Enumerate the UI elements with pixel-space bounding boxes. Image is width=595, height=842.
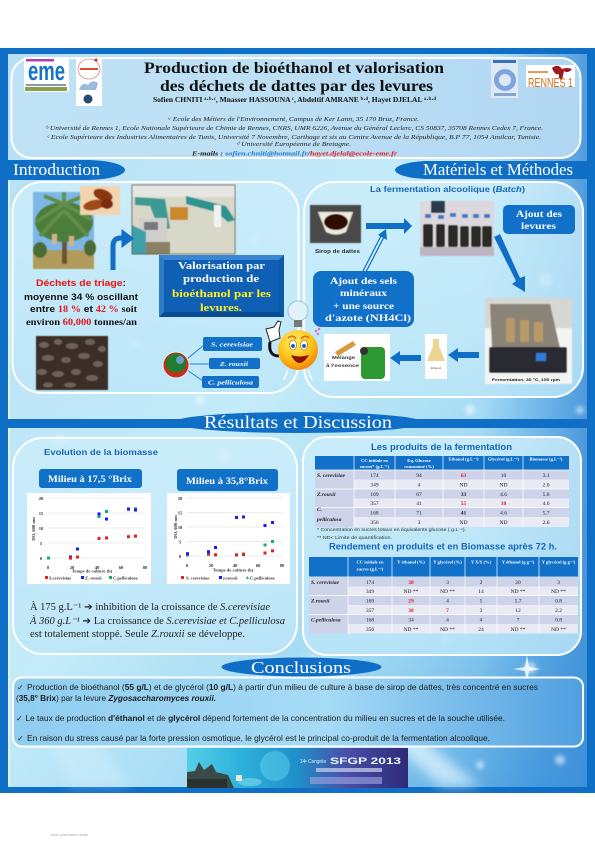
table: yields: CC initiale en — [356, 560, 384, 564]
title — [144, 60, 444, 95]
chart: biomass at 35.8 Brix: 80 — [280, 563, 285, 568]
table: yields: ND ** — [551, 589, 566, 595]
table: yields: Y glycérol (%) — [433, 560, 462, 564]
label: milieu 17,5 Brix: Milieu à 17,5 °Brix — [48, 474, 132, 485]
table: fermentation products: 5.8 — [543, 492, 550, 498]
header panel — [12, 56, 580, 158]
footnotes: * Concentration en sucres totaux en équivalents glucose ( g.L⁻¹). — [317, 527, 466, 532]
table: yields: S. cerevisiae — [311, 580, 340, 586]
chart: biomass at 35.8 Brix: 40 — [233, 563, 238, 568]
image: date syrup — [310, 205, 361, 243]
table: yields: 357 — [366, 608, 374, 614]
table: fermentation products: Biomasse (g.L⁻¹) — [530, 456, 563, 462]
callout: valorisation: levures. — [200, 303, 242, 314]
table: yields: 3 — [557, 580, 560, 586]
callout: ajout des levures — [503, 205, 575, 234]
panel: evolution de la biomasse — [13, 438, 297, 654]
chart: biomass at 17.5 Brix: 40 — [95, 565, 100, 570]
table: yields: 168 — [366, 618, 374, 624]
section heading: Matériels et Méthodes: Matériels et Méthodes — [423, 160, 573, 179]
arrow: minerals to flow — [363, 229, 387, 272]
chart: biomass at 17.5 Brix: Temps de culture (h) — [72, 568, 113, 574]
table: yields: ND ** — [511, 627, 526, 633]
chart: biomass at 35.8 Brix: S. cerevisiae — [186, 576, 209, 580]
table: fermentation products: 41 — [416, 501, 422, 507]
table: yields: 24 — [478, 627, 484, 633]
chart: biomass at 17.5 Brix: S.cerevisiae — [49, 576, 71, 580]
table: yields: 0.8 — [555, 618, 562, 624]
table: yields: 3 — [480, 608, 483, 614]
banner: SFGP 2013 — [187, 748, 408, 788]
table: yields: 174 — [366, 580, 374, 586]
table: yields: ND ** — [440, 589, 455, 595]
logo: EME — [24, 56, 69, 92]
text: growth interpretation — [29, 601, 285, 640]
table: yields: ND ** — [440, 627, 455, 633]
panel title: rendement: Rendement en produits et en Biomasse après 72 h. — [329, 542, 557, 552]
text: growth interpretation: À 175 g.L⁻¹ ➔ inhibition de la croissance de S.cerevisiae — [30, 601, 271, 613]
affiliations: ᵈ Université Européenne de Bretagne. — [237, 141, 351, 148]
text: déchets de triage: moyenne 34 % oscillant — [24, 292, 138, 302]
chart: biomass at 35.8 Brix: DO, 600 nm — [173, 515, 178, 539]
table: yields: 5 — [480, 598, 483, 604]
table: yields: 12 — [515, 608, 521, 614]
table: yields: 4 — [446, 598, 449, 604]
image: date palm — [33, 192, 96, 269]
logo: ESIAT — [491, 58, 518, 98]
chart: biomass at 17.5 Brix — [27, 493, 151, 584]
table: fermentation products: 41 — [461, 510, 466, 516]
section heading: Résultats et Discussion — [8, 412, 587, 433]
text: déchets de triage: Déchets de triage : — [36, 278, 126, 288]
table: fermentation products — [315, 456, 569, 527]
title: Production de bioéthanol et valorisation — [144, 60, 444, 77]
yeast strains diagram: S. cerevisiae — [211, 342, 253, 348]
table: yields: ND ** — [404, 589, 419, 595]
chart: biomass at 17.5 Brix: 80 — [143, 565, 148, 570]
callout: ajout des sels minéraux: + une source — [333, 302, 394, 312]
table: fermentation products: 4 — [418, 482, 421, 488]
callout: ajout des sels minéraux: d'azote (NH4Cl) — [325, 313, 411, 324]
conclusion 3: En raison du stress causé par la forte pression osmotique, le glycérol est le principal co-produit de la fermentation alcoolique. — [27, 734, 490, 743]
table: fermentation products: 169 — [370, 492, 379, 498]
chart: biomass at 35.8 Brix: 5 — [179, 540, 182, 544]
table: fermentation products: Z.rouxii — [316, 492, 336, 498]
image: fuel blend — [324, 334, 390, 381]
table: fermentation products: 356 — [370, 520, 379, 526]
arrow: flask to mixture — [390, 351, 421, 365]
table: fermentation products: S. cerevisiae — [317, 473, 346, 479]
arrow: to valorisation — [113, 234, 130, 270]
label: milieu 35,8 Brix — [177, 469, 278, 491]
panel title: produits de la fermentation: Les produits de la fermentation — [371, 442, 512, 452]
table: fermentation products: 2.0 — [543, 482, 550, 488]
table: yields — [309, 557, 578, 634]
table: yields: 2.2 — [555, 608, 562, 614]
table: yields: Z.rouxii — [310, 598, 330, 604]
table: yields: Y éthanol (g g⁻¹) — [502, 560, 535, 564]
section heading: Conclusions — [222, 658, 382, 677]
table: yields: 7 — [517, 618, 520, 624]
table: yields: 4 — [446, 618, 449, 624]
chart: biomass at 17.5 Brix: 60 — [119, 565, 124, 570]
chart: biomass at 35.8 Brix — [167, 493, 290, 584]
footnotes: ** ND< Limite de quantification. — [317, 535, 392, 540]
table: fermentation products: ND — [500, 520, 507, 526]
table: fermentation products: consommé (%) — [404, 464, 434, 469]
chart: biomass at 17.5 Brix: Z. rouxii — [85, 576, 102, 580]
chart: biomass at 35.8 Brix: 20 — [209, 563, 214, 568]
table: fermentation products: 3 — [418, 520, 421, 526]
table: yields: sucres (g.L⁻¹) — [357, 566, 384, 572]
e-mails: E-mails : sofien.chniti@hotmail.fr /hayet.djelal@ecole-eme.fr — [191, 150, 398, 158]
text: déchets de triage: environ 60,000 tonnes/an — [26, 317, 137, 327]
logo: Université de Rennes 1 — [526, 65, 575, 90]
callout: ajout des levures: levures — [521, 221, 557, 231]
chart: biomass at 17.5 Brix: 10 — [39, 526, 44, 531]
image: sorted date waste — [36, 336, 108, 390]
label: milieu 17,5 Brix — [39, 469, 142, 488]
table: fermentation products: 63 — [461, 473, 466, 479]
table: yields: ND ** — [511, 589, 526, 595]
table: yields: ND ** — [404, 627, 419, 633]
table: fermentation products: 168 — [370, 510, 379, 516]
arrow: syrup to bottles — [366, 218, 412, 234]
table: fermentation products: 5.7 — [543, 510, 550, 516]
panel: introduction — [12, 182, 298, 393]
table: fermentation products: C. — [317, 507, 322, 513]
table: yields: 34 — [408, 618, 414, 624]
arrow: shaker to flask — [448, 348, 479, 362]
logo: EME: eme — [28, 56, 65, 86]
table: fermentation products: 4.6 — [500, 492, 507, 498]
conclusion 1: Production de bioéthanol ( 55 g/L) et de glycérol (10 g/L) à partir d'un milieu de culture à base de sirop de dattes, très concentré en sucres — [27, 683, 538, 692]
table: yields: Y glycérol (g g⁻¹) — [542, 560, 576, 564]
image: culture bottles — [420, 201, 494, 256]
yeast strains diagram — [163, 337, 262, 388]
table: fermentation products: 2.6 — [543, 520, 550, 526]
table: yields: 14 — [478, 589, 484, 595]
conclusion 1 — [16, 683, 538, 703]
table: fermentation products: 174 — [370, 473, 379, 479]
affiliations: ᵇ Université de Rennes 1, Ecole Nationale Supérieure de Chimie de Rennes, CNRS, UMR 6226, Avenue du Général Leclerc, CS 50837, 35708 Rennes Cedex 7, France. — [46, 125, 543, 132]
chart: biomass at 17.5 Brix: 15 — [39, 511, 44, 516]
image: fuel blend: Mélange — [332, 355, 356, 360]
callout: ajout des sels minéraux — [313, 271, 414, 327]
callout: valorisation: production de — [183, 274, 259, 285]
conclusion 2: ✓ Le taux de production d'éthanol et de glycérol dépend fortement de la concentration du milieu en sucres et de la souche utilisée. — [16, 714, 505, 723]
chart: biomass at 17.5 Brix: 0 — [47, 565, 50, 570]
text: déchets de triage — [24, 278, 138, 327]
chart: biomass at 35.8 Brix: 15 — [178, 510, 183, 516]
table: fermentation products: 10 — [501, 473, 506, 479]
table: yields: 169 — [366, 598, 374, 604]
conclusion 1: ✓ — [17, 683, 24, 692]
section heading: Introduction — [8, 160, 125, 180]
conclusion 1: (35,8° Brix) par la levure Zygosaccharomyces rouxii. — [16, 694, 216, 703]
table: yields: 7 — [446, 608, 449, 614]
table: fermentation products: 67 — [416, 492, 422, 498]
chart: biomass at 35.8 Brix: 10 — [178, 525, 183, 530]
table: yields: 0.8 — [555, 598, 562, 604]
table: fermentation products: 4.6 — [500, 510, 507, 516]
banner: SFGP 2013: 14ᵉ Congrès — [300, 759, 326, 765]
section heading: Conclusions: Conclusions — [251, 658, 351, 677]
callout: ajout des levures: Ajout des — [516, 209, 563, 219]
chart: biomass at 35.8 Brix: C.pelliculosa — [250, 576, 275, 580]
table: yields: 4 — [480, 618, 483, 624]
table: fermentation products: sucres* (g.L⁻¹) — [360, 464, 389, 469]
icon: smiley with idea bulb — [266, 301, 320, 380]
table: yields: 29 — [408, 598, 414, 604]
panel title: La fermentation alcoolique ( Batch ) — [370, 184, 525, 194]
chart: biomass at 17.5 Brix: 0 — [40, 556, 43, 561]
affiliations: ᶜ Ecole Supérieure des Industries Alimentaires de Tunis, Université 7 Novembre, Carthage et sis au Centre Avenue de la République, B.P 77, 1054 Amilcar, Tunisie. — [47, 134, 541, 141]
banner: SFGP 2013: SFGP 2013 — [330, 756, 401, 766]
chart: biomass at 17.5 Brix: 20 — [39, 496, 44, 501]
table: fermentation products: 349 — [370, 482, 379, 488]
image: flask — [425, 334, 447, 379]
table: fermentation products: 357 — [370, 501, 379, 507]
affiliations — [46, 116, 543, 148]
logos: partner column — [76, 57, 102, 106]
table: yields: C.pelliculosa — [311, 618, 341, 624]
table: yields: 2 — [480, 580, 483, 586]
conclusion 3: ✓ — [17, 734, 24, 743]
chart: biomass at 35.8 Brix: 0 — [179, 554, 182, 559]
callout: ajout des sels minéraux: Ajout des sels — [330, 277, 397, 287]
table: fermentation products: 4.6 — [543, 501, 550, 507]
title: des déchets de dattes par des levures — [160, 78, 433, 95]
text: growth interpretation: À 360 g.L⁻¹ ➔ La croissance de S.cerevisiae et C.pelliculosa — [29, 615, 285, 627]
affiliations: ᵃ Ecole des Métiers de l'Environnement, Campus de Ker Lann, 35 170 Bruz, France. — [168, 116, 419, 123]
section heading: Résultats et Discussion: Résultats et Discussion — [204, 412, 392, 432]
callout: valorisation — [159, 255, 284, 317]
table: yields: 20 — [515, 580, 521, 586]
chart: biomass at 35.8 Brix: 60 — [256, 563, 261, 568]
text: growth interpretation: est totalement stoppé. Seule Z.rouxii se développe. — [30, 629, 245, 640]
chart: biomass at 35.8 Brix: z.rouxii — [223, 576, 238, 580]
image: dates — [80, 186, 120, 215]
callout: ajout des sels minéraux: minéraux — [340, 289, 387, 299]
authors: Sofien CHNITI ᵃ·ᵇ·ᶜ, Mnasser HASSOUNA ᶜ, Abdeltif AMRANE ᵇ·ᵈ, Hayet DJELAL ᵃ·ᵇ·ᵈ — [153, 95, 437, 104]
table: yields: 3 — [446, 580, 449, 586]
table: fermentation products: Glycérol (g.L⁻¹) — [488, 456, 520, 462]
table: fermentation products: Ethanol (g.L⁻¹) — [448, 456, 479, 462]
chart: biomass at 17.5 Brix: 20 — [70, 565, 75, 570]
table: yields: Y éthanol (%) — [397, 560, 425, 564]
table: fermentation products: 10 — [501, 501, 506, 507]
arrow: to shaker — [494, 234, 525, 292]
footer: view publication stats: View publication stats — [50, 832, 88, 837]
chart: biomass at 35.8 Brix: Temps de culture (h) — [213, 568, 254, 572]
table: fermentation products: CC initiale en — [361, 458, 388, 463]
chart: biomass at 17.5 Brix: 5 — [40, 541, 43, 546]
panel: conclusions — [13, 678, 583, 746]
callout: valorisation: bioéthanol par les — [172, 289, 271, 300]
chart: biomass at 35.8 Brix: 0 — [186, 563, 189, 568]
table: yields: 5.7 — [515, 598, 522, 604]
table: fermentation products: ND — [460, 520, 467, 526]
table: fermentation products: 3.1 — [543, 473, 550, 479]
image: sorting line — [132, 185, 235, 254]
text: déchets de triage: entre 18 % et 42 % soit — [30, 304, 137, 314]
table: yields: 349 — [366, 589, 374, 595]
chart: biomass at 17.5 Brix: C.pelliculosa — [113, 576, 138, 580]
table: fermentation products: Eq. Glucose — [407, 458, 431, 463]
table: fermentation products: ND — [500, 482, 507, 488]
table: fermentation products: ND — [460, 482, 467, 488]
panel title: Evolution de la biomasse — [44, 447, 158, 457]
image: fuel blend: à l'essence — [326, 363, 360, 368]
callout: valorisation: Valorisation par — [178, 261, 265, 272]
logo: Université de Rennes 1: RENNES 1 — [528, 75, 573, 90]
table: fermentation products: 94 — [416, 473, 422, 479]
image: flask: Éthanol — [431, 365, 441, 370]
image: orbital shaker — [485, 298, 572, 384]
panel: matériels et méthodes — [304, 182, 583, 397]
chart: biomass at 35.8 Brix: 20 — [178, 496, 183, 501]
table: yields: 356 — [366, 627, 374, 633]
panel: produits et rendements — [303, 437, 581, 655]
table: yields: ND ** — [551, 627, 566, 633]
label: milieu 35,8 Brix: Milieu à 35,8°Brix — [186, 476, 268, 487]
yeast strains diagram: Z. rouxii — [219, 361, 248, 368]
table: yields: 38 — [408, 608, 414, 614]
table: fermentation products: 33 — [461, 492, 466, 498]
label: sirop de dattes: Sirop de dattes — [315, 249, 360, 255]
chart: biomass at 17.5 Brix: DO, 600 nm — [31, 517, 36, 541]
section heading: Introduction: Introduction — [13, 160, 100, 179]
table: fermentation products: 71 — [416, 510, 422, 516]
table: yields: Y X/S (%) — [471, 560, 492, 564]
footnotes — [317, 527, 466, 540]
image: orbital shaker: Fermentation, 30 °C, 150 rpm — [492, 378, 560, 382]
table: fermentation products: 55 — [461, 501, 466, 507]
yeast strains diagram: C. pelliculosa — [208, 380, 254, 386]
table: fermentation products: pelliculosa — [316, 517, 342, 523]
table: yields: 38 — [408, 580, 414, 586]
